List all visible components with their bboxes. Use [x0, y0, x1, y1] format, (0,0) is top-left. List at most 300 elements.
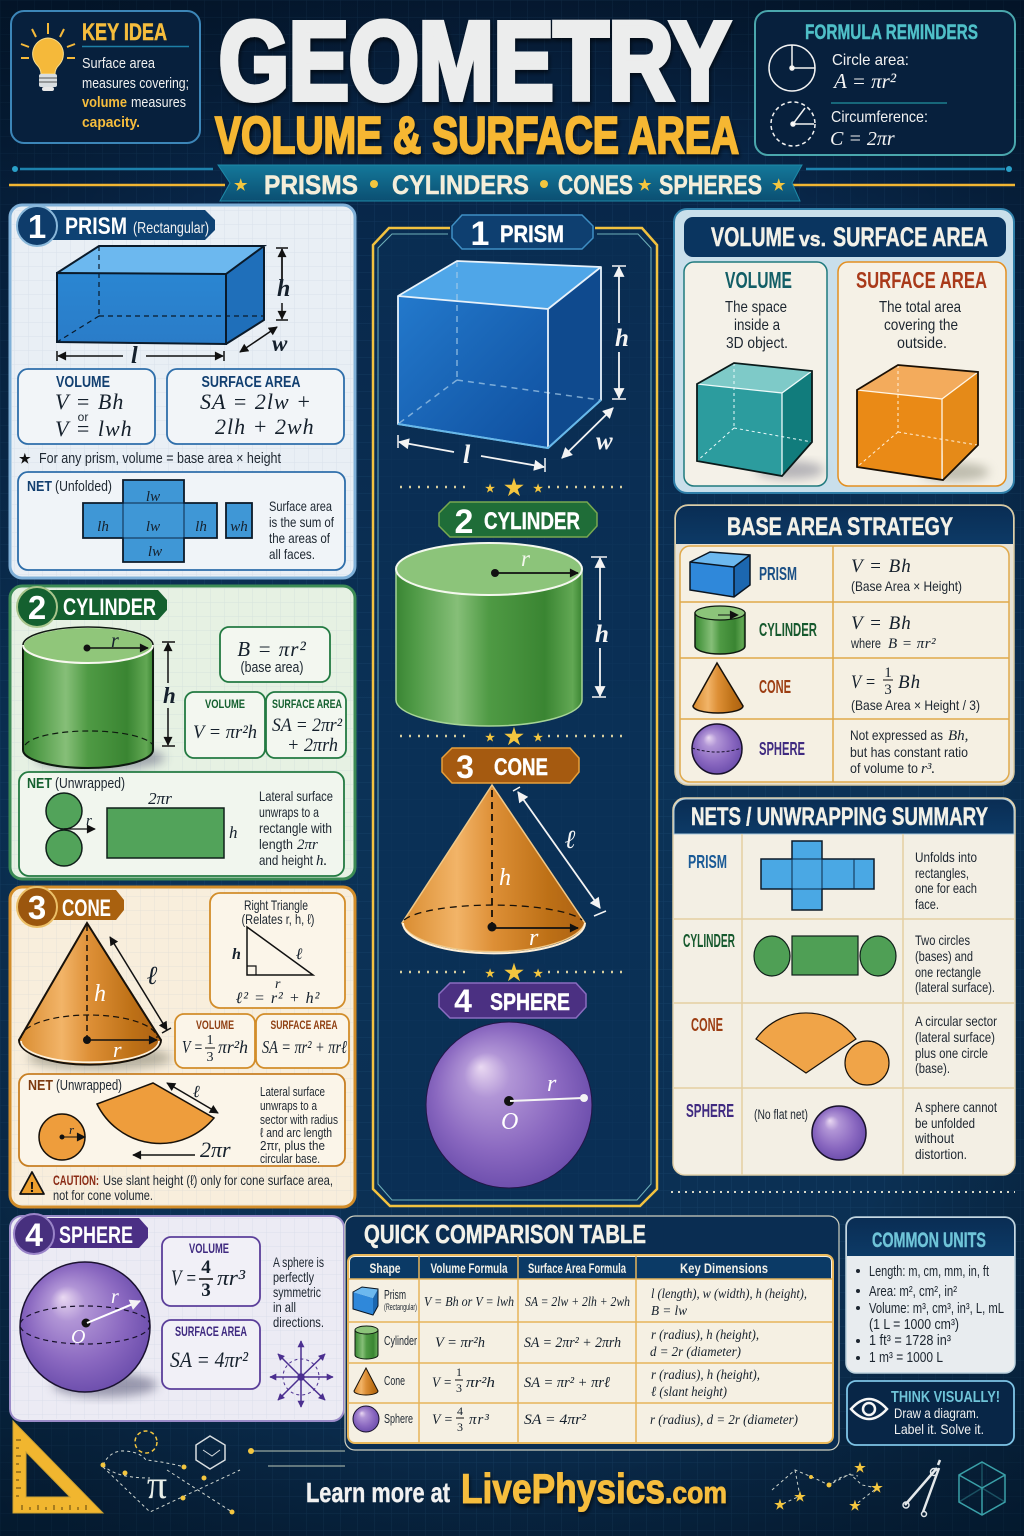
- banner: ★: [234, 177, 248, 194]
- badge: 3 cone: CONE: [494, 754, 548, 781]
- row: cone: [354, 1365, 760, 1400]
- box: surface area: 2lh + 2wh: [215, 414, 315, 439]
- row: cone: πr²h: [466, 1375, 495, 1391]
- row formulas: V = Bh: [851, 613, 912, 634]
- separators: ★: [504, 960, 524, 985]
- row: prism: SA = 2lw + 2lh + 2wh: [525, 1295, 630, 1310]
- text: net note: unwraps to a: [260, 1098, 318, 1113]
- row: sphere: A sphere cannot: [915, 1099, 997, 1115]
- diagram: cylinder: r: [111, 630, 119, 652]
- diagram: large prism: [398, 261, 629, 472]
- box: volume: [185, 692, 265, 758]
- text: symmetry note: symmetric: [273, 1284, 321, 1300]
- badge: 4 sphere: 4: [25, 1217, 43, 1253]
- formula: circle area: [832, 52, 909, 93]
- box: net unfolded: NET: [27, 478, 52, 495]
- box: volume: V =: [182, 1037, 203, 1057]
- diagram: cone net: [39, 1082, 231, 1162]
- badge: 4 sphere: SPHERE: [59, 1222, 133, 1249]
- heading: vs.: [799, 229, 826, 251]
- row formulas: r³.: [921, 761, 935, 777]
- badge: 4 sphere: SPHERE: [490, 989, 570, 1016]
- diagram: cone: r: [113, 1037, 122, 1062]
- note: prism volume: For any prism, volume = base area × height: [39, 450, 282, 467]
- row: prism: [353, 1287, 807, 1319]
- card: volume: inside a: [734, 317, 780, 334]
- diagram: cylinder: h: [163, 683, 176, 708]
- panel: think visually: [847, 1381, 1014, 1445]
- badge: 1 prism: PRISM: [500, 221, 564, 248]
- icon: cone: [693, 663, 743, 713]
- diagram: prism net: wh: [230, 519, 248, 535]
- diagram: large sphere: [426, 1022, 592, 1188]
- box: right triangle: [210, 893, 345, 1008]
- row: prism: (Rectangular): [384, 1302, 417, 1312]
- row formulas: [850, 556, 980, 777]
- text: net note: [269, 498, 334, 562]
- footer: learn more: [306, 1465, 727, 1512]
- decoration: star constellation: ★: [854, 1460, 866, 1475]
- box: surface area: SA = πr² + πrℓ: [262, 1037, 347, 1057]
- text: net note: Lateral surface: [260, 1084, 325, 1099]
- text: key idea body: measures: [131, 94, 186, 111]
- icon: compass: [903, 1460, 940, 1516]
- diagram: prism net: lw: [146, 489, 160, 505]
- decoration: math constellation: [100, 1431, 345, 1514]
- badge: 3 cone: CONE: [62, 895, 111, 922]
- diagram: cone: ℓ: [147, 961, 158, 990]
- row formulas: V = Bh: [851, 556, 912, 577]
- box: net unfolded: (Unfolded): [55, 478, 112, 495]
- text: net note: ℓ and arc length: [260, 1125, 332, 1140]
- panel: nets summary: [673, 798, 1015, 1175]
- row: prism: [688, 841, 977, 912]
- diagram: prism net: [83, 480, 252, 562]
- diagram: prism net: lw: [146, 519, 160, 535]
- table header: Volume Formula: [430, 1260, 508, 1276]
- box: net unwrapped: (Unwrapped): [55, 775, 125, 792]
- badge: 1 prism: [17, 206, 215, 246]
- text: symmetry note: A sphere is: [273, 1254, 324, 1270]
- box: right triangle: ℓ² = r² + h²: [236, 990, 321, 1007]
- diagram: prism net: lh: [195, 519, 207, 535]
- row: sphere: 4: [457, 1404, 463, 1418]
- box: right triangle: ℓ: [295, 946, 303, 963]
- box: volume: [162, 1237, 260, 1306]
- heading: key idea: KEY IDEA: [82, 19, 167, 46]
- row formulas: but has constant ratio: [850, 744, 968, 760]
- card: volume: The space: [725, 299, 787, 316]
- text: key idea body: [82, 55, 189, 131]
- diagram: large cone: r: [529, 925, 539, 951]
- row: cylinder: V = πr²h: [435, 1335, 485, 1351]
- table: strategy rows: [680, 546, 1009, 782]
- box: volume: or: [78, 410, 88, 424]
- row formulas: B = πr²: [888, 636, 936, 652]
- badge: 3 cone: 3: [28, 889, 46, 926]
- row: cylinder: [355, 1326, 759, 1360]
- row: cylinder: Two circles: [915, 932, 970, 948]
- box: right triangle: r: [275, 977, 281, 992]
- row: cone: [691, 1013, 997, 1085]
- row: prism: B = lw: [651, 1304, 688, 1319]
- row: cylinder: one rectangle: [915, 964, 981, 980]
- heading: [684, 217, 1006, 257]
- row labels: CYLINDER: [759, 620, 817, 640]
- box: surface area: SURFACE AREA: [272, 697, 342, 711]
- decoration: star constellation: ★: [871, 1480, 883, 1495]
- card: surface area: [838, 262, 1006, 486]
- callout: caution: !: [30, 1179, 34, 1196]
- diagram: cone net: 2πr: [200, 1137, 231, 1162]
- text: net note: [260, 1084, 338, 1166]
- decoration: star constellation: ★: [774, 1497, 786, 1512]
- row formulas: of volume to: [850, 760, 918, 776]
- note: prism volume: ★: [19, 451, 31, 466]
- text: symmetry note: directions.: [273, 1314, 324, 1330]
- icon: teal cube: [697, 363, 824, 479]
- diagram: large cone: h: [499, 865, 511, 891]
- diagram: large cone: [402, 785, 606, 953]
- decoration: star constellation: [772, 1460, 883, 1513]
- row: sphere: V =: [432, 1412, 453, 1428]
- card: volume: VOLUME: [725, 267, 792, 293]
- banner: SPHERES: [659, 170, 762, 200]
- box: volume: 3: [201, 1280, 211, 1301]
- diagram: cylinder: [23, 627, 176, 770]
- box: volume: 4: [201, 1257, 211, 1278]
- row: sphere: Sphere: [384, 1411, 413, 1426]
- diagram: rectangular prism: h: [277, 276, 290, 302]
- decoration: star constellation: ★: [794, 1489, 806, 1504]
- badge: 2 cylinder: CYLINDER: [484, 508, 580, 535]
- badge: 1 prism: PRISM: [65, 213, 127, 240]
- badge: 2 cylinder: 2: [455, 503, 473, 541]
- box: volume: V =: [171, 1265, 197, 1290]
- list: units: 1 m³ = 1000 L: [869, 1350, 943, 1366]
- subtitle: VOLUME & SURFACE AREA: [215, 107, 739, 165]
- row: cylinder: (bases) and: [915, 948, 973, 964]
- panel: common units: [846, 1217, 1015, 1373]
- badge: 1 prism: (Rectangular): [133, 220, 209, 237]
- row: cylinder: d = 2r (diameter): [650, 1345, 741, 1360]
- row: sphere: [686, 1099, 997, 1162]
- box: surface area: SURFACE AREA: [175, 1323, 247, 1339]
- row: cone: V =: [432, 1375, 452, 1391]
- box: volume: V = πr²h: [193, 722, 257, 743]
- banner: PRISMS: [264, 170, 358, 200]
- box: volume: 1: [206, 1033, 214, 1048]
- panel: formula reminders: [755, 11, 1015, 155]
- diagram: cone: h: [94, 981, 106, 1007]
- row: cylinder: [683, 931, 995, 995]
- diagram: cylinder net: 2πr: [148, 789, 172, 808]
- row: sphere: (No flat net): [754, 1107, 808, 1122]
- row formulas: V =: [851, 672, 876, 693]
- title: GEOMETRY: [219, 0, 730, 123]
- card: volume: 3D object.: [726, 335, 788, 352]
- icon: symmetry arrows: [270, 1341, 333, 1407]
- text: key idea body: capacity.: [82, 114, 140, 131]
- box: surface area: SA = 4πr²: [170, 1347, 248, 1372]
- box: surface area: SA = 2πr²: [272, 715, 342, 736]
- callout: caution: CAUTION:: [53, 1172, 99, 1188]
- banner: ★: [638, 177, 652, 194]
- box: volume: 3: [206, 1050, 214, 1065]
- text: net note: Lateral surface: [259, 788, 333, 804]
- row formulas: where: [850, 635, 881, 651]
- row: cone: 1: [456, 1365, 462, 1379]
- callout: caution: not for cone volume.: [53, 1187, 153, 1203]
- panel: volume vs surface area: [674, 209, 1014, 493]
- banner: [9, 165, 1015, 201]
- box: net unfolded: [18, 472, 345, 570]
- box: volume: V = Bh: [55, 389, 124, 414]
- text: net note: 2πr, plus the: [260, 1138, 325, 1153]
- diagram: sphere: [20, 1262, 157, 1397]
- formula: circumference: C = 2πr: [830, 128, 895, 150]
- row formulas: 3: [884, 682, 892, 698]
- diagram: rectangular prism: w: [272, 331, 288, 356]
- callout: caution: Use slant height (ℓ) only for cone surface area,: [103, 1172, 333, 1188]
- text: net note: sector with radius: [260, 1112, 338, 1127]
- badge: 2 cylinder: 2: [28, 589, 46, 626]
- text: key idea body: volume: [82, 94, 127, 111]
- separators: ★: [533, 732, 543, 744]
- list: units: [856, 1264, 1004, 1366]
- diagram: rectangular prism: l: [131, 343, 138, 369]
- diagram: cone net: ℓ: [193, 1082, 200, 1101]
- row labels: PRISM: [759, 564, 797, 584]
- box: net unwrapped: NET: [28, 1077, 53, 1094]
- separators: ★: [485, 968, 495, 980]
- list: units: Area: m², cm², in²: [869, 1284, 957, 1300]
- row: prism: one for each: [915, 880, 977, 896]
- row: prism: Unfolds into: [915, 849, 977, 865]
- box: volume: V = lwh: [55, 416, 133, 441]
- row: sphere: without: [914, 1130, 954, 1146]
- badge: 1 prism: [452, 215, 593, 253]
- box: base area: B = πr²: [237, 637, 307, 661]
- row formulas: Bh,: [948, 728, 968, 744]
- row formulas: (Base Area × Height / 3): [851, 697, 980, 713]
- diagram: prism net: lw: [148, 544, 162, 560]
- box: surface area: SA = 2lw +: [200, 389, 312, 414]
- box: volume: VOLUME: [189, 1240, 229, 1256]
- formula: circle area: Circle area:: [832, 52, 909, 69]
- text: net note: 2πr: [297, 837, 318, 853]
- row: sphere: distortion.: [915, 1146, 967, 1162]
- row formulas: Not expressed as: [850, 727, 943, 743]
- diagram: large prism: w: [596, 428, 613, 455]
- row: cone: plus one circle: [915, 1045, 988, 1061]
- panel: 4 sphere: [10, 1214, 344, 1421]
- row: cone: A circular sector: [915, 1013, 997, 1029]
- text: key idea body: measures covering;: [82, 75, 189, 92]
- row: cone: r (radius), h (height),: [651, 1368, 760, 1383]
- box: surface area: SURFACE AREA: [202, 374, 301, 391]
- text: symmetry note: perfectly: [273, 1269, 314, 1285]
- panel: 3 cone: [10, 887, 355, 1207]
- row: sphere: be unfolded: [915, 1115, 975, 1131]
- panel: 2 cylinder: [10, 586, 355, 879]
- text: symmetry note: in all: [273, 1299, 296, 1315]
- diagram: cone net: r: [69, 1122, 75, 1137]
- icon: dashed circle: [771, 102, 815, 146]
- text: net note: is the sum of: [269, 514, 334, 530]
- row: cylinder: SA = 2πr² + 2πrh: [524, 1335, 621, 1351]
- separators: [400, 475, 625, 985]
- icon: circle with radius: [769, 45, 815, 91]
- box: volume: VOLUME: [196, 1018, 234, 1032]
- box: base area: [220, 627, 330, 682]
- diagram: large cylinder: [396, 543, 609, 726]
- row: sphere: r (radius), d = 2r (diameter): [650, 1413, 798, 1428]
- diagram: cylinder net: [46, 789, 238, 866]
- box: net unwrapped: [19, 1074, 345, 1166]
- box: right triangle: (Relates r, h, ℓ): [242, 911, 314, 927]
- badge: 2 cylinder: [439, 502, 597, 541]
- box: volume: [175, 1014, 255, 1068]
- list: units: (1 L = 1000 cm³): [869, 1317, 959, 1333]
- separators: ★: [485, 483, 495, 495]
- card: surface area: outside.: [897, 335, 947, 352]
- text: think visually: [891, 1389, 1000, 1437]
- text: net note: rectangle with: [259, 820, 332, 836]
- panel: center shape gallery: [373, 215, 657, 1206]
- text: think visually: Draw a diagram.: [894, 1405, 979, 1421]
- box: surface area: [162, 1320, 260, 1389]
- separators: ★: [504, 475, 524, 500]
- badge: 2 cylinder: [17, 587, 167, 627]
- diagram: large sphere: O: [501, 1109, 518, 1135]
- box: volume: VOLUME: [205, 697, 245, 711]
- table header: Shape: [370, 1260, 401, 1276]
- diagram: cylinder net: r: [86, 813, 92, 829]
- diagram: cylinder net: h: [229, 823, 238, 842]
- row: prism: Prism: [384, 1287, 406, 1302]
- table header: [370, 1260, 768, 1276]
- text: key idea body: Surface area: [82, 55, 156, 72]
- diagram: rectangular prism: [57, 246, 290, 369]
- table: [348, 1255, 833, 1443]
- list: units: Length: m, cm, mm, in, ft: [869, 1264, 989, 1280]
- icon: wireframe cube: [959, 1462, 1005, 1515]
- box: net unwrapped: [19, 772, 344, 876]
- icon: sphere: [692, 724, 742, 774]
- icon: prism: [690, 552, 750, 597]
- text: net note: length: [259, 836, 293, 852]
- panel: key idea: [11, 11, 200, 143]
- list: units: 1 ft³ = 1728 in³: [869, 1333, 951, 1349]
- table header: Surface Area Formula: [528, 1260, 626, 1276]
- row: prism: PRISM: [688, 852, 727, 872]
- text: net note: circular base.: [260, 1151, 320, 1166]
- row: cone: (lateral surface): [915, 1029, 995, 1045]
- card: surface area: The total area: [879, 299, 961, 316]
- row: sphere: πr³: [469, 1412, 490, 1428]
- row: cone: 3: [456, 1381, 462, 1395]
- row: prism: face.: [915, 896, 939, 912]
- text: net note: [259, 788, 333, 869]
- heading: BASE AREA STRATEGY: [727, 513, 953, 541]
- box: surface area: + 2πrh: [287, 735, 338, 756]
- badge: 1 prism: 1: [471, 215, 489, 253]
- text: think visually: Label it. Solve it.: [894, 1421, 984, 1437]
- separators: ★: [533, 968, 543, 980]
- banner: CYLINDERS: [392, 170, 529, 200]
- icon: orange cube: [857, 365, 989, 481]
- diagram: sphere: O: [71, 1326, 85, 1348]
- text: net note: Surface area: [269, 498, 332, 514]
- text: net note: the areas of: [269, 530, 330, 546]
- formula: circumference: [830, 109, 928, 150]
- row: prism: l (length), w (width), h (height),: [651, 1287, 807, 1302]
- badge: 4 sphere: [14, 1214, 148, 1254]
- badge: 2 cylinder: CYLINDER: [63, 594, 156, 621]
- row: sphere: SPHERE: [686, 1101, 734, 1121]
- heading: QUICK COMPARISON TABLE: [364, 1219, 646, 1249]
- text: net note: and height: [259, 852, 313, 868]
- row: cone: ℓ (slant height): [651, 1385, 727, 1400]
- diagram: large prism: l: [463, 440, 471, 469]
- badge: 1 prism: 1: [28, 208, 46, 245]
- box: base area: (base area): [240, 659, 304, 676]
- badge: 4 sphere: [439, 983, 586, 1019]
- row: cone: (base).: [915, 1060, 950, 1076]
- diagram: large prism: h: [615, 325, 629, 352]
- panel: base area strategy: [675, 505, 1014, 785]
- box: volume: VOLUME: [56, 374, 110, 391]
- box: net unwrapped: NET: [27, 775, 52, 792]
- box: surface area: [266, 692, 346, 758]
- text: net note: all faces.: [269, 546, 315, 562]
- icon: set square: [13, 1421, 103, 1513]
- row: cylinder: r (radius), h (height),: [651, 1328, 759, 1343]
- row: sphere: SA = 4πr²: [524, 1412, 587, 1428]
- box: surface area: [167, 369, 344, 444]
- footer: learn more: LivePhysics: [461, 1465, 665, 1512]
- panel: quick comparison table: [345, 1216, 839, 1450]
- separators: ★: [485, 732, 495, 744]
- box: net unwrapped: (Unwrapped): [56, 1077, 122, 1094]
- card: volume: [684, 262, 827, 486]
- table header: Key Dimensions: [680, 1260, 768, 1276]
- row labels: [759, 564, 817, 759]
- decoration: star constellation: ★: [849, 1498, 861, 1513]
- row: sphere: [353, 1404, 798, 1434]
- box: right triangle: h: [232, 946, 241, 963]
- text: net note: h.: [316, 853, 327, 869]
- diagram: large cylinder: h: [595, 621, 609, 648]
- badge: 3 cone: [442, 748, 579, 785]
- row: sphere: 3: [457, 1420, 463, 1434]
- badge: 3 cone: [17, 887, 124, 927]
- diagram: large cone: ℓ: [565, 825, 576, 854]
- row: cylinder: (lateral surface).: [915, 979, 995, 995]
- callout: caution: [20, 1172, 333, 1203]
- diagram: large sphere: r: [547, 1071, 557, 1097]
- icon: cylinder: [695, 606, 745, 654]
- separators: ★: [533, 483, 543, 495]
- card: surface area: covering the: [884, 317, 958, 334]
- row formulas: Bh: [898, 672, 921, 693]
- row: prism: V = Bh or V = lwh: [424, 1295, 514, 1310]
- row: prism: rectangles,: [915, 865, 969, 881]
- banner: CONES: [558, 170, 633, 200]
- footer: learn more: .com: [665, 1475, 727, 1510]
- formula: circle area: A = πr²: [832, 69, 897, 93]
